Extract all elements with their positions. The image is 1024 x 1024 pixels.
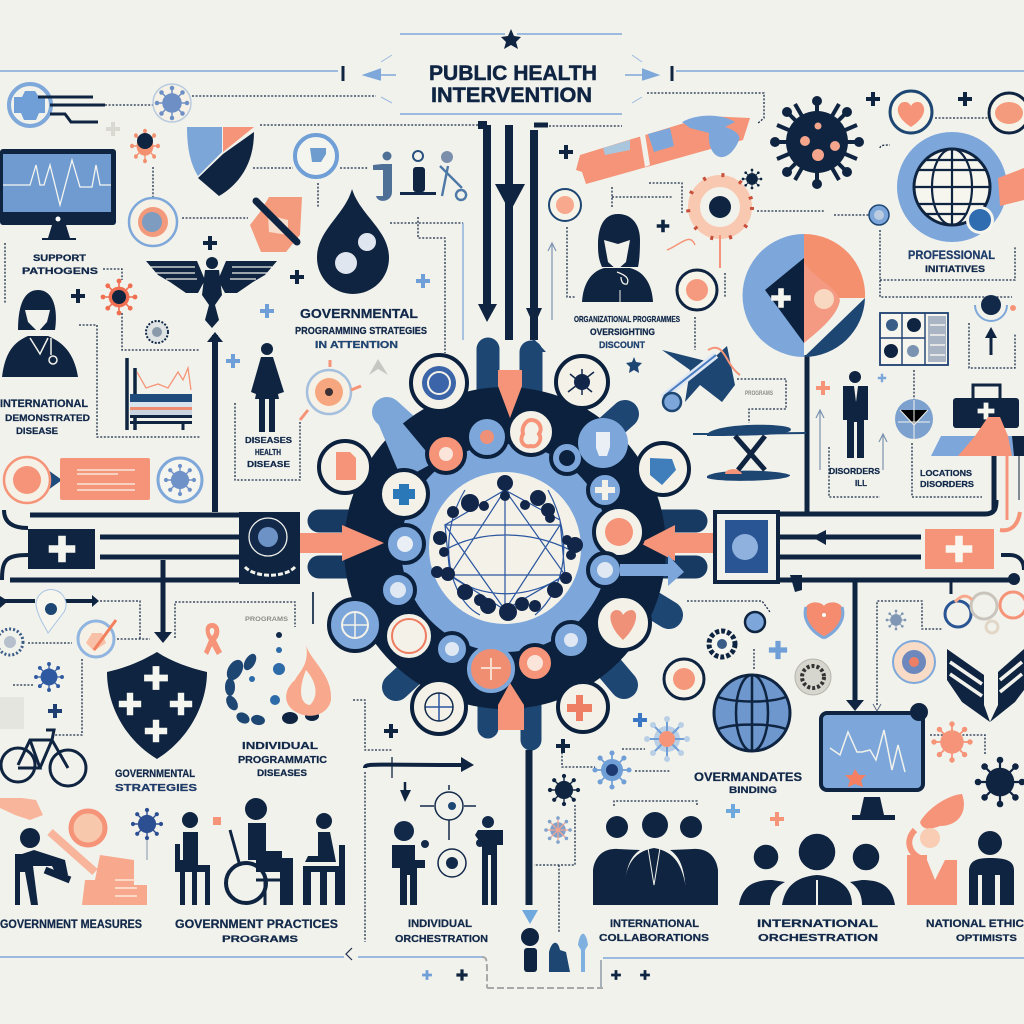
hub: central diagram	[300, 339, 715, 740]
left branch arrows	[0, 595, 99, 608]
icon: heart circle	[890, 91, 932, 133]
text: bottom labels right: NATIONAL ETHIC	[926, 918, 1024, 930]
text: small label: DISEASE	[247, 460, 291, 469]
text: left label: DEMONSTRATED	[5, 413, 90, 424]
icon: thin navy needle	[312, 592, 314, 624]
text: bottom labels left: GOVERNMENT PRACTICES	[175, 919, 338, 931]
text: left label	[0, 398, 90, 437]
icon: blood drop	[317, 189, 389, 294]
icon: virus coral small	[130, 129, 160, 163]
hub top right arrow cap	[520, 339, 546, 352]
icon: coral circle far right	[989, 93, 1024, 133]
text: left label: DISEASE	[16, 426, 58, 437]
icon: plus left	[48, 704, 62, 718]
icon: coral small mark	[213, 817, 221, 825]
text: governmental heading: IN ATTENTION	[315, 340, 398, 351]
icon: coral blue circle	[893, 641, 935, 683]
text: small label: DISEASES	[245, 436, 293, 445]
coral curve right	[1000, 512, 1020, 530]
right connector bus	[778, 500, 1024, 700]
arrow outline monitor	[873, 704, 881, 711]
title block	[400, 29, 622, 114]
hub arms	[319, 349, 696, 740]
icon: desk person coral	[0, 798, 147, 905]
icon: small blue circle	[745, 612, 765, 632]
icon: coral texture circle	[677, 270, 717, 310]
text: governmental strategies: STRATEGIES	[115, 782, 197, 794]
icon: shield tricolor	[187, 127, 254, 196]
icon: eye circle with arrow	[975, 295, 1016, 355]
icon: plane device	[662, 346, 740, 411]
icon: small virus middle	[886, 610, 906, 630]
text: left label: INTERNATIONAL	[0, 398, 88, 410]
hub circles	[319, 355, 689, 734]
coral note box	[60, 458, 150, 500]
icon: business group one	[593, 812, 718, 905]
text: bottom labels right: ORCHESTRATION	[758, 933, 878, 944]
icon: big virus	[770, 96, 864, 189]
hub upper-left blue pointer	[378, 420, 435, 480]
text: small label	[245, 436, 293, 469]
icon: star navy	[626, 357, 642, 373]
chart: pie with cross	[743, 234, 865, 357]
text: bottom labels right: COLLABORATIONS	[599, 933, 709, 944]
text: short label left: PATHOGENS	[22, 266, 98, 276]
hub circle large blue	[578, 418, 628, 468]
icon: plus marks blue	[226, 274, 430, 368]
hub coral arrows	[300, 370, 715, 730]
icon: coral syringe circle	[78, 620, 116, 657]
text: governmental strategies	[115, 768, 197, 794]
icon: coral ring circle	[664, 659, 704, 699]
hub dark disc	[344, 387, 666, 709]
icon: grid panel	[880, 313, 948, 365]
text: short label left	[22, 253, 98, 276]
icon: business group two	[739, 833, 895, 905]
icon: virus dark	[709, 631, 735, 657]
text: governmental heading: PROGRAMMING STRATEGIES	[295, 326, 427, 337]
icon: grey pale circle	[0, 697, 24, 729]
icon: bicycle	[1, 730, 86, 786]
icon: wings emblem	[947, 649, 1024, 722]
thin blue connector	[462, 223, 464, 340]
emblem box left	[239, 512, 300, 584]
text: labels right: ILL	[855, 478, 867, 488]
icon: caduceus wings	[146, 257, 277, 328]
icon: circle lab	[129, 198, 177, 246]
icon: woman doctor	[582, 214, 653, 302]
text: bottom labels right: INTERNATIONAL	[757, 918, 878, 930]
left connector bus	[2, 510, 240, 632]
thin arrows right	[548, 243, 887, 470]
icon: star plus right	[369, 359, 388, 375]
icon: people figures	[373, 151, 466, 201]
icon: blue brain globe	[895, 399, 933, 440]
title text: INTERVENTION	[431, 84, 592, 107]
text: overhead binding	[694, 772, 802, 795]
icon: monitor ECG	[0, 149, 116, 240]
right panel: brochure coral	[576, 116, 750, 184]
text: professional initiatives: INITIATIVES	[925, 264, 985, 274]
text: bottom labels right: INTERNATIONAL	[610, 918, 699, 930]
icon: coral professional	[907, 794, 964, 905]
icon: viruses left	[0, 629, 64, 692]
icon: grey circle	[795, 659, 831, 695]
small grey text lines: PROGRAMS	[245, 617, 288, 623]
icon: plus marks	[71, 236, 304, 303]
text: bottom labels left: ORCHESTRATION	[395, 934, 488, 945]
icon: navy person right	[969, 831, 1014, 905]
icon: blue globe lower	[714, 675, 790, 751]
icon: seated person right	[303, 813, 345, 905]
text: labels right	[745, 391, 974, 489]
icon: wheelchair person	[226, 798, 293, 905]
bottom plus marks	[384, 724, 650, 981]
icon: stretcher	[693, 425, 806, 481]
text: community label: DISEASES	[257, 768, 307, 778]
icon: coral ring virus	[667, 169, 762, 268]
icon: blue virus circle	[158, 458, 202, 502]
icon: woman silhouette	[251, 343, 284, 432]
text: bottom labels right: OPTIMISTS	[956, 933, 1017, 943]
bottom rule	[0, 957, 1024, 988]
hub inner circle	[429, 472, 581, 624]
title text: PUBLIC HEALTH	[429, 62, 597, 85]
header rules and arrows	[0, 55, 1024, 103]
text: professional initiatives: PROFESSIONAL	[908, 248, 995, 262]
hub blue ring	[401, 444, 609, 652]
icon: viruses lower	[544, 716, 1024, 844]
text: governmental strategies: GOVERNMENTAL	[115, 768, 195, 780]
text: overhead binding: OVERMANDATES	[694, 772, 802, 784]
icon: coral lab circle	[300, 360, 361, 420]
icon: laurel drops flame	[223, 632, 331, 726]
text: bottom labels left	[0, 918, 488, 945]
icon: top-left circle	[9, 84, 105, 126]
text: demonstrated label	[574, 314, 680, 350]
icon: virus coral	[101, 279, 137, 315]
icon: globe with eye	[897, 132, 1024, 242]
text: labels right: LOCATIONS	[920, 468, 972, 478]
icon: chart monitor	[821, 703, 928, 820]
icon: virus blue lower left	[131, 808, 163, 860]
text: bottom labels left: GOVERNMENT MEASURES	[0, 919, 142, 931]
icon: nurse	[2, 290, 78, 377]
icon: medkit with peak	[931, 385, 1024, 520]
text: governmental heading: GOVERNMENTAL	[300, 306, 418, 321]
title text	[429, 62, 597, 107]
icon: blue ring circle	[295, 135, 337, 177]
text: community label: INDIVIDUAL	[242, 741, 318, 752]
arrow head left branch	[154, 632, 172, 643]
text: demonstrated label: OVERSIGHTING	[590, 327, 655, 337]
chart: line bars	[127, 358, 192, 430]
navy cross box	[28, 529, 95, 569]
icon: star	[501, 29, 521, 49]
text: small label: HEALTH	[255, 448, 281, 457]
text: labels right: DISORDERS	[829, 466, 880, 476]
hub network globe	[431, 475, 583, 621]
text: short label left: SUPPORT	[33, 253, 87, 263]
icon: ribbon	[204, 623, 222, 655]
icon: virus grey	[146, 321, 168, 343]
icon: individual group network	[346, 757, 503, 960]
text: demonstrated label: DISCOUNT	[599, 340, 645, 350]
icon: small people bottom	[521, 750, 588, 972]
arrows: vertical flow into hub	[207, 125, 807, 512]
text: bottom labels right	[599, 918, 1024, 944]
plus marks top right	[559, 92, 972, 232]
hub blue pointer right	[620, 555, 684, 586]
coral cross box	[925, 529, 994, 569]
icon: seated person left	[175, 812, 210, 905]
text: bottom labels left: INDIVIDUAL	[408, 918, 472, 930]
icon: virus circle top	[153, 84, 191, 122]
text: professional initiatives	[908, 248, 995, 274]
icon: small connector circle	[869, 205, 889, 225]
icon: ribbon heart	[805, 602, 843, 638]
text: labels right: DISORDERS	[920, 479, 974, 489]
icon: coral circle pointer	[4, 457, 62, 503]
text: overhead binding: BINDING	[729, 785, 777, 795]
text: bottom labels left: PROGRAMS	[222, 934, 298, 945]
icon: interlinked rings right	[945, 592, 1024, 633]
icon: plus blue lower	[726, 804, 740, 818]
text: community label	[238, 741, 327, 778]
icon: coral mask with stick	[250, 197, 302, 252]
arrow heads right branch	[790, 530, 1020, 711]
text: community label: PROGRAMMATIC	[238, 755, 327, 766]
icon: coral circle small	[549, 189, 581, 221]
icon: small plus grey	[106, 122, 120, 136]
emblem box right	[715, 512, 778, 582]
icon: plus marks lower	[556, 641, 787, 753]
text: demonstrated label: ORGANIZATIONAL PROGRAMMES	[574, 314, 680, 324]
hub circle icons	[336, 369, 676, 721]
text: governmental heading	[295, 306, 427, 351]
icon: man silhouette	[843, 371, 868, 458]
icon: shield with crosses	[107, 652, 207, 759]
icon: plus coral lower	[770, 812, 784, 826]
text: labels right: PROGRAMS	[745, 391, 773, 397]
plus marks right	[816, 374, 886, 395]
icon: location pin	[36, 590, 66, 633]
